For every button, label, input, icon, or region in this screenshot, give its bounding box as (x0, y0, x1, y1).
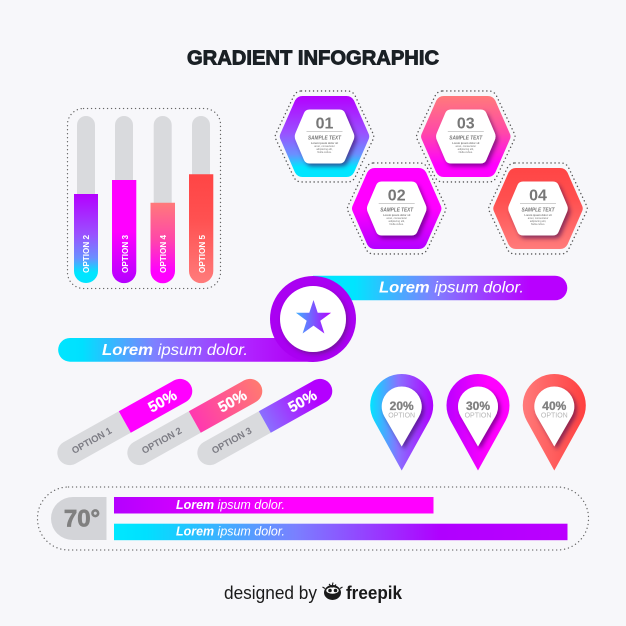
hexagon 02: Nulla cubus. (390, 222, 404, 226)
bar: option 2: OPTION 2 (82, 234, 91, 273)
pin: 30%: OPTION (465, 412, 491, 420)
hexagon 01 (275, 91, 374, 182)
hexagon 04: Lorem ipsum dolor sit (524, 213, 552, 217)
hexagon 01: 01 (316, 116, 334, 132)
hexagon 03: Lorem ipsum dolor sit (452, 141, 480, 145)
pin: 20%: OPTION (388, 412, 415, 420)
pill: option 3: OPTION 3 (210, 426, 254, 457)
hexagon 02 (347, 163, 446, 254)
hexagon 04: adipiscing elit, (530, 219, 546, 223)
hexagon 03: Nulla cubus. (459, 150, 473, 154)
pill: option 2: 50% (215, 387, 250, 416)
footer credit (224, 582, 403, 603)
pill: option 2 (123, 374, 267, 470)
hexagon 01: Nulla cubus. (317, 150, 332, 154)
pin: 30%: 30% (466, 399, 490, 413)
pill: option 1 (53, 374, 197, 470)
title: GRADIENT INFOGRAPHIC (187, 46, 439, 70)
bar: second (114, 524, 568, 540)
hexagon 04: amet, consectetur (528, 216, 548, 220)
hexagon 01: SAMPLE TEXT (308, 136, 342, 142)
bar: option 5 (189, 116, 213, 283)
designed by: designed by (224, 583, 317, 603)
hexagon 04: Nulla cubus. (531, 222, 545, 226)
pin: 30% (446, 374, 510, 470)
hexagon 02: SAMPLE TEXT (380, 208, 414, 214)
hexagon 03: amet, consectetur (455, 144, 476, 148)
pill: option 3: 50% (285, 387, 320, 416)
bottom ribbon (58, 338, 313, 362)
bottom ribbon label: Lorem ipsum dolor. (102, 342, 248, 359)
hexagon 04 (489, 163, 587, 254)
hexagon 04: SAMPLE TEXT (522, 208, 555, 214)
pill: option 2: OPTION 2 (140, 426, 184, 457)
hexagon 01: Lorem ipsum dolor sit (311, 141, 338, 145)
bar: first: Lorem ipsum dolor. (176, 498, 285, 512)
icon: star (296, 300, 331, 334)
bar: second: Lorem ipsum dolor. (176, 524, 285, 538)
hexagon 02: Lorem ipsum dolor sit (383, 213, 410, 217)
pill: option 1: OPTION 1 (70, 425, 114, 457)
value: 70 degrees: 70° (64, 506, 100, 532)
hexagon 03: 03 (457, 116, 475, 132)
bar: option 3 (112, 116, 136, 283)
hexagon 03: adipiscing elit, (458, 147, 474, 151)
bar: option 4: OPTION 4 (159, 234, 168, 273)
top ribbon (313, 276, 567, 300)
hexagon 04: 04 (529, 188, 547, 204)
panel: horizontal bars (38, 487, 588, 550)
hexagon 01: adipiscing elit, (316, 147, 333, 151)
star banner (58, 276, 567, 362)
bar: option 4 (150, 116, 175, 283)
freepik wordmark: freepik (346, 583, 403, 603)
hexagon 02: adipiscing elit, (389, 219, 405, 223)
pill: option 3 (193, 374, 337, 470)
grey value tab (51, 497, 106, 540)
hexagon 02: amet, consectetur (386, 216, 407, 220)
pin: 40% (523, 374, 586, 470)
panel: vertical option bars (68, 108, 220, 288)
pin: 20%: 20% (390, 399, 414, 413)
bar: option 3: OPTION 3 (121, 234, 130, 273)
hexagon 02: 02 (388, 188, 406, 204)
icon: freepik logo (322, 582, 342, 600)
bar: option 2 (74, 116, 98, 283)
white disc (280, 286, 346, 352)
pin: 20% (370, 374, 433, 470)
hexagon 03 (417, 91, 515, 182)
pin: 40%: OPTION (541, 412, 568, 420)
hexagon 03: SAMPLE TEXT (449, 136, 483, 142)
bar: option 5: OPTION 5 (198, 234, 207, 273)
top ribbon label: Lorem ipsum dolor. (379, 280, 524, 297)
bar: first (114, 497, 434, 514)
purple ring (270, 276, 356, 362)
hexagon 01: amet, consectetur (314, 144, 335, 148)
pin: 40%: 40% (542, 399, 567, 413)
pill: option 1: 50% (145, 387, 180, 416)
